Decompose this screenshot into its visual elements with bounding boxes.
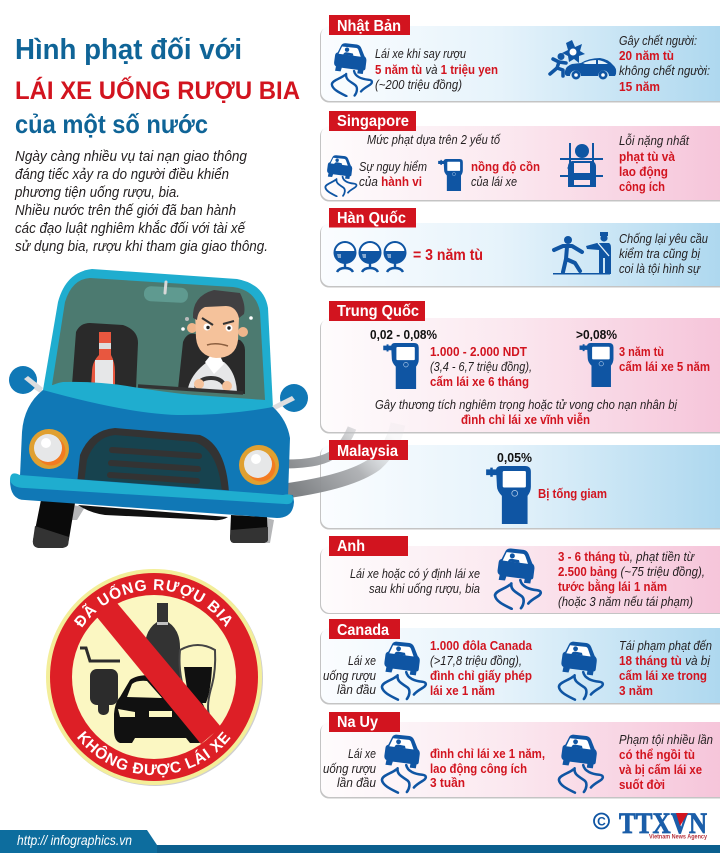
text: behaviour <box>359 159 427 189</box>
text: repeat penalty <box>619 732 713 792</box>
text: first penalty: (>17,8 triệu đồng), <box>430 653 522 668</box>
text: low level penalty: cấm lái xe 6 tháng <box>430 374 529 389</box>
text: offence: sau khi uống rượu, bia <box>369 581 480 596</box>
text: refusal <box>619 231 708 276</box>
text: fatal accident penalty: 20 năm tù <box>619 48 674 63</box>
text: first offence: uống rượu <box>323 668 376 683</box>
text: 3 years: = 3 năm tù <box>413 247 483 264</box>
text: fatal accident penalty <box>619 33 710 94</box>
text: serious injury: đình chỉ lái xe vĩnh viễn <box>461 412 590 427</box>
icon: breathalyzer <box>383 343 419 389</box>
title: Hình phạt đối với <box>15 34 242 66</box>
text: repeat penalty: 18 tháng tù và bị <box>619 653 711 668</box>
text: first penalty: 3 tuần <box>430 775 465 790</box>
text: behaviour: của hành vi <box>359 174 422 189</box>
text: alcohol level: nồng độ cồn <box>471 159 540 174</box>
panel: Malaysia <box>285 424 720 530</box>
text: high level penalty: 3 năm tù <box>619 344 664 359</box>
panel: Anh <box>320 536 720 614</box>
title <box>15 34 300 139</box>
text: repeat penalty: cấm lái xe trong <box>619 668 707 683</box>
intro text block: các đạo luật nghiêm khắc đối với tài xế <box>15 220 246 237</box>
text: first offence <box>323 653 376 697</box>
text: drunk driving penalty: 5 năm tù và 1 triệu yen <box>375 62 498 77</box>
text: two factors: Mức phạt dựa trên 2 yếu tố <box>367 132 501 147</box>
icon: breathalyzer <box>438 159 463 191</box>
text: penalty: 3 - 6 tháng tù, phạt tiền từ <box>558 549 695 564</box>
icon: breathalyzer <box>580 343 613 387</box>
icon: officer stopping a walker <box>553 232 611 274</box>
text: refusal: kiểm tra cũng bị <box>619 246 701 261</box>
label: Anh: Anh <box>337 538 365 555</box>
text: penalty: (hoặc 3 năm nếu tái phạm) <box>558 594 693 609</box>
text: drunk driving penalty: Lái xe khi say rượu <box>375 46 466 61</box>
icon: skidding car <box>382 735 426 793</box>
icon: skidding car <box>559 642 603 700</box>
icon: skidding car <box>495 548 541 609</box>
text: serious injury: Gây thương tích nghiêm trọng hoặc tử vong cho nạn nhân bị <box>375 397 678 412</box>
icon: skidding car <box>325 155 356 196</box>
text: first offence <box>323 746 376 790</box>
text: first penalty: lái xe 1 năm <box>430 683 495 698</box>
text: heaviest penalty <box>619 133 690 194</box>
text: heaviest penalty: phạt tù và <box>619 149 676 164</box>
label: Hàn Quốc: Hàn Quốc <box>337 210 406 227</box>
label: Na Uy: Na Uy <box>337 714 378 731</box>
logo: copyright and TTXVN <box>594 807 708 840</box>
text: low level penalty: (3,4 - 6,7 triệu đồng), <box>430 359 532 374</box>
icon: prisoner behind bars <box>560 143 603 187</box>
text: heaviest penalty: công ích <box>619 179 665 194</box>
text: low level penalty <box>430 344 532 389</box>
intro text block: sử dụng bia, rượu khi tham gia giao thông. <box>15 239 268 255</box>
icon: breathalyzer <box>486 466 531 524</box>
text: repeat penalty <box>619 638 712 698</box>
label: Anh <box>329 536 408 556</box>
text: first offence: lần đầu <box>337 775 376 790</box>
text: first penalty: lao động công ích <box>430 761 527 776</box>
text: first penalty <box>430 638 533 698</box>
text: offence <box>350 566 480 596</box>
text: first offence: uống rượu <box>323 761 376 776</box>
smoke trails behind the car <box>285 424 398 491</box>
panel: Hàn Quốc <box>320 208 720 288</box>
panel: Na Uy <box>320 712 720 798</box>
text: first offence: Lái xe <box>348 746 376 761</box>
icon: skidding car <box>332 43 372 96</box>
text: repeat penalty: có thể ngồi tù <box>619 747 695 762</box>
text: refusal: coi là tội hình sự <box>619 261 701 276</box>
text: alcohol level <box>471 159 540 189</box>
text: drunk driving penalty: (~200 triệu đồng) <box>375 77 462 92</box>
text: repeat penalty: 3 năm <box>619 683 653 698</box>
label: Na Uy <box>329 712 400 732</box>
no drink driving sign: ĐÃ UỐNG RƯỢU BIA <box>74 579 232 628</box>
text: level: 0,05% <box>497 450 532 465</box>
intro text block: phương tiện uống rượu, bia. <box>14 185 180 201</box>
text: high level penalty: cấm lái xe 5 năm <box>619 359 710 374</box>
footer url: http:// infographics.vn <box>17 832 132 848</box>
intro text block: đáng tiếc xảy ra do người điều khiển <box>15 167 229 183</box>
text: first offence: Lái xe <box>348 653 376 668</box>
title: của một số nước <box>15 109 208 139</box>
panel: Trung Quốc <box>320 301 720 434</box>
icon: skidding car <box>559 735 603 793</box>
text: serious injury <box>375 397 678 427</box>
text: repeat penalty: suốt đời <box>619 777 665 792</box>
text: heaviest penalty: Lỗi nặng nhất <box>619 133 690 148</box>
intro text block <box>14 149 268 255</box>
label: Malaysia: Malaysia <box>337 443 398 460</box>
no drink driving sign <box>46 569 263 786</box>
intro text block: Ngày càng nhiều vụ tai nạn giao thông <box>15 149 247 165</box>
text: alcohol level: của lái xe <box>471 174 517 189</box>
text: high level penalty <box>619 344 710 374</box>
label: Trung Quốc: Trung Quốc <box>337 303 419 320</box>
text: first penalty: 1.000 đôla Canada <box>430 638 533 653</box>
text: refusal: Chống lại yêu cầu <box>619 231 708 246</box>
panel: Canada <box>320 619 720 704</box>
text: first offence: lần đầu <box>337 682 376 697</box>
text: penalty: 2.500 bảng (~75 triệu đồng), <box>558 564 705 579</box>
icon: car hitting pedestrian <box>550 40 616 80</box>
text: offence: Lái xe hoặc có ý định lái xe <box>350 566 480 581</box>
intro text block: Nhiều nước trên thế giới đã ban hành <box>15 203 236 219</box>
text: repeat penalty: và bị cấm lái xe <box>619 762 702 777</box>
logo: copyright and TTXVN: C <box>597 814 606 828</box>
label: Canada <box>329 619 400 639</box>
illustration: drunk driver in blue car <box>9 269 308 548</box>
text: fatal accident penalty: 15 năm <box>619 79 660 94</box>
text: level high: >0,08% <box>576 327 617 342</box>
text: first penalty: đình chỉ lái xe 1 năm, <box>430 746 545 761</box>
icon: three glasses <box>334 242 406 272</box>
text: jail: Bị tống giam <box>538 486 607 501</box>
text: behaviour: Sự nguy hiểm <box>359 159 427 174</box>
panel: Singapore <box>320 111 720 202</box>
label: Canada: Canada <box>337 622 389 639</box>
label: Nhật Bản: Nhật Bản <box>337 18 401 35</box>
text: drunk driving penalty <box>375 46 498 92</box>
text: penalty <box>558 549 705 609</box>
no drink driving sign: KHÔNG ĐƯỢC LÁI XE <box>77 730 231 778</box>
text: penalty: tước bằng lái 1 năm <box>558 579 667 594</box>
panel: Nhật Bản <box>320 15 720 102</box>
icon: skidding car <box>382 642 426 700</box>
logo: copyright and TTXVN: Vietnam News Agency <box>649 834 708 840</box>
footer bar <box>0 830 720 853</box>
label: Singapore: Singapore <box>337 113 409 130</box>
text: level low: 0,02 - 0,08% <box>370 327 437 342</box>
text: first penalty <box>430 746 545 790</box>
title: LÁI XE UỐNG RƯỢU BIA <box>15 75 300 105</box>
text: first penalty: đình chỉ giấy phép <box>430 668 532 683</box>
text: heaviest penalty: lao động <box>619 164 668 179</box>
text: low level penalty: 1.000 - 2.000 NDT <box>430 344 527 359</box>
text: fatal accident penalty: Gây chết người: <box>619 33 697 48</box>
